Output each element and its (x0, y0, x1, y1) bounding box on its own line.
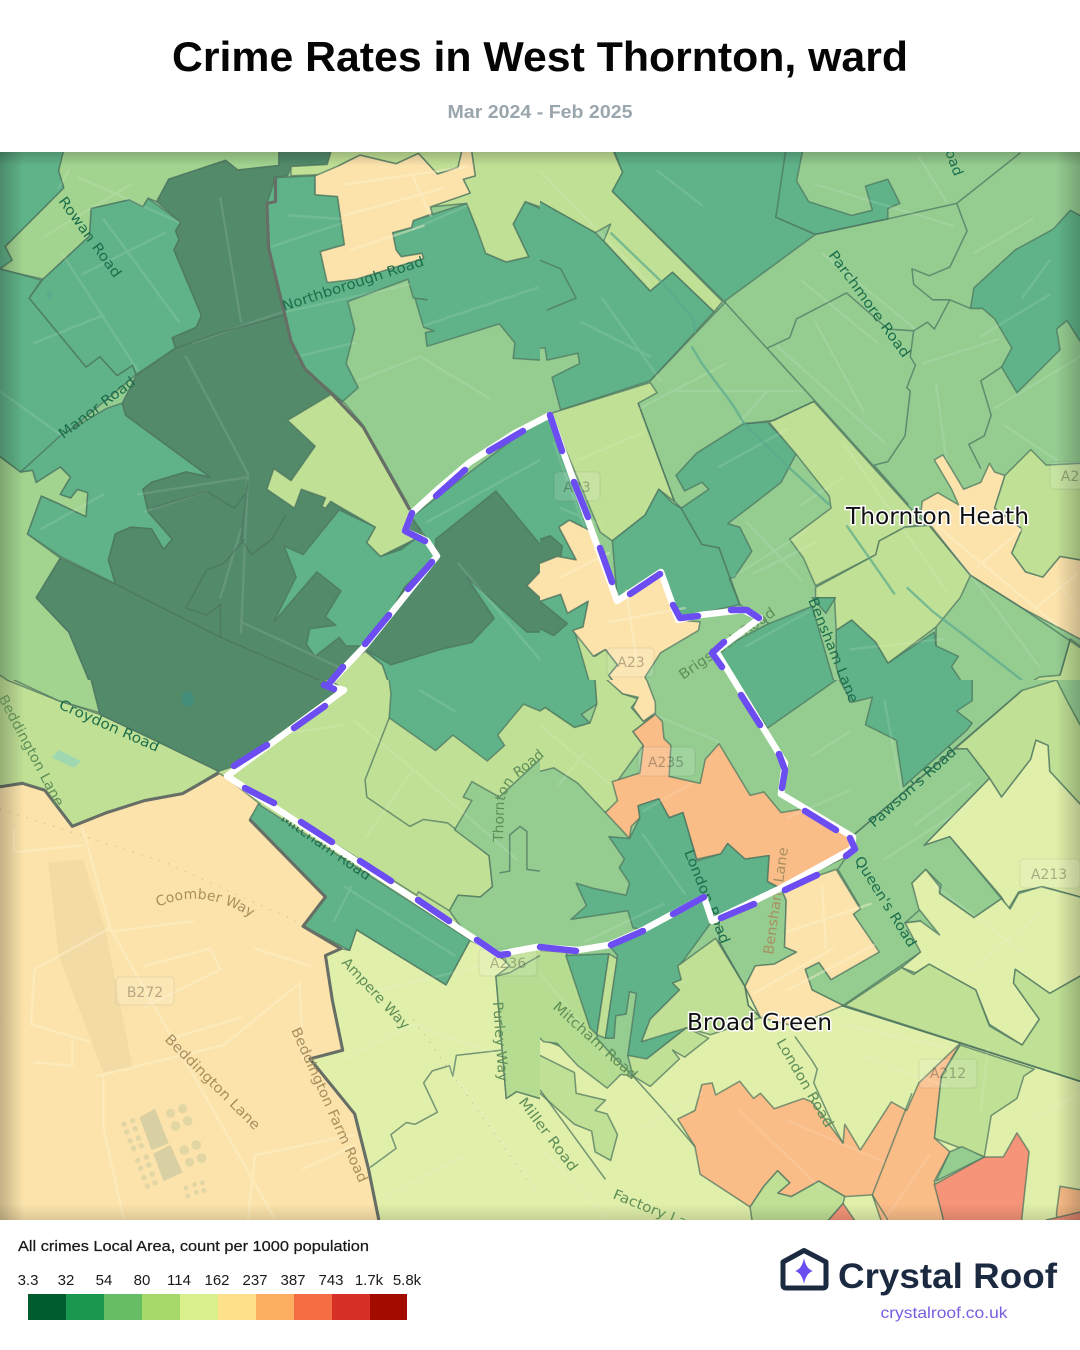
road labels: Rowan Road (55, 194, 124, 281)
road labels: Beddington Lane (161, 1032, 263, 1133)
legend values: 1.7k (355, 1272, 384, 1289)
road shields (116, 462, 1080, 1088)
map region: south-west, Beddington and Mitcham Road (0, 670, 551, 1231)
wordmark: Crystal Roof (838, 1257, 1057, 1296)
legend values: 32 (58, 1272, 74, 1289)
road shields: A2 (1061, 469, 1079, 485)
road shields: A23 (563, 480, 591, 496)
road labels: Coomber Way (156, 888, 254, 917)
road labels: London Road (680, 848, 733, 946)
icon: house with star (783, 1250, 826, 1288)
road labels: Pawson's Road (866, 744, 960, 831)
road labels: Beddington Farm Road (287, 1025, 370, 1185)
road labels: Mitcham Road (278, 810, 374, 884)
legend values: 114 (167, 1272, 191, 1289)
road labels: Purley Way (489, 1001, 511, 1082)
road labels: Manor Road (56, 374, 139, 442)
legend values: 54 (96, 1272, 112, 1289)
legend scale (18, 1272, 422, 1320)
road shields: B272 (127, 985, 163, 1001)
place label: Broad Green: Broad Green (687, 1010, 832, 1036)
legend values: 80 (134, 1272, 150, 1289)
legend values: 162 (204, 1272, 230, 1289)
map region: north-east neighbourhoods and Thornton Heath (530, 140, 1080, 701)
map region: north-west neighbourhoods (0, 140, 551, 701)
legend values: 5.8k (393, 1272, 422, 1289)
legend values: 3.3 (18, 1272, 38, 1289)
legend values (18, 1272, 422, 1289)
road labels: Factory Lane (611, 1187, 707, 1238)
map base (0, 152, 1080, 1220)
website url: crystalroof.co.uk (880, 1305, 1009, 1322)
road labels: London Road (773, 1036, 836, 1131)
road shields: A236 (490, 956, 526, 972)
title: Crime Rates in West Thornton, ward (172, 33, 908, 80)
road shields: A23 (617, 655, 645, 671)
legend colour swatches (28, 1294, 407, 1320)
place label: Thornton Heath: Thornton Heath (845, 504, 1029, 530)
subtitle: date range: Mar 2024 - Feb 2025 (448, 102, 632, 122)
ward boundary: West Thornton dashed outline (227, 415, 855, 955)
road labels: Parchmore Road (910, 62, 966, 178)
road labels (0, 152, 964, 1220)
map region: south-east, Broad Green (530, 670, 1080, 1231)
road shields: A212 (930, 1066, 966, 1082)
legend values: 743 (318, 1272, 344, 1289)
cream block crossing the ward centre (527, 572, 540, 598)
road labels: Queen's Road (851, 854, 919, 950)
road shields: A235 (648, 755, 684, 771)
map edge vignette (0, 152, 1080, 1220)
road labels: Mitcham Road (549, 999, 640, 1083)
road labels: Bensham Lane (761, 846, 792, 956)
road labels: Croydon Road (56, 697, 162, 756)
road labels: Miller Road (515, 1095, 581, 1175)
road labels: Ampere Way (338, 955, 413, 1033)
logo: Crystal Roof (783, 1250, 1057, 1322)
legend title: All crimes Local Area, count per 1000 population (18, 1238, 369, 1255)
legend values: 237 (242, 1272, 268, 1289)
legend values: 387 (280, 1272, 306, 1289)
road labels: Parchmore Road (825, 248, 913, 361)
road shields: A213 (1031, 867, 1067, 883)
road labels: Thornton Road (492, 748, 544, 842)
road labels: Northborough Road (280, 254, 426, 315)
road labels: Brigstock Road (676, 605, 779, 683)
road labels: Bensham Lane (804, 596, 861, 705)
